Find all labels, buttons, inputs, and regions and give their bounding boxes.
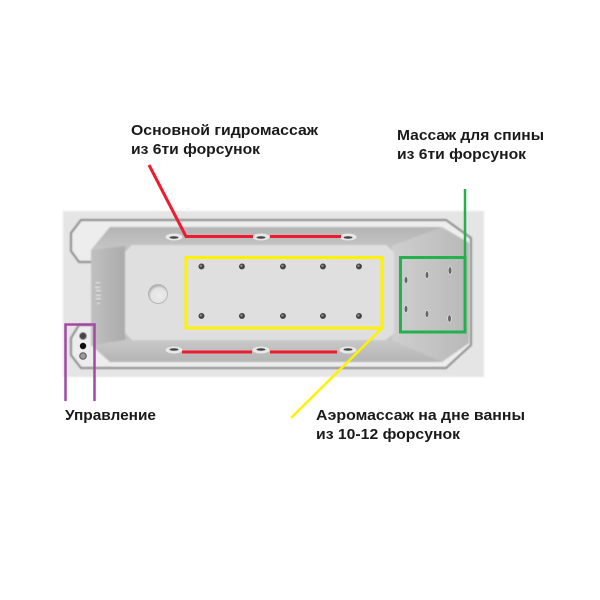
floor jets [198, 264, 362, 319]
label: back massage: из 6ти форсунок [397, 146, 527, 163]
label: aeromassage: из 10-12 форсунок [316, 426, 461, 443]
rim inner surface [71, 220, 471, 368]
red markers: main hydromassage [149, 165, 341, 352]
label: main hydromassage: Основной гидромассаж [131, 122, 318, 139]
drain [148, 284, 168, 304]
basin [91, 227, 469, 362]
rim [71, 220, 471, 368]
green marker: back massage [400, 189, 465, 332]
label: back massage: Массаж для спины [397, 127, 544, 144]
label: main hydromassage: из 6ти форсунок [131, 141, 261, 158]
tub deck [63, 211, 484, 377]
bathtub [63, 211, 484, 377]
back jets [404, 267, 452, 322]
label: controls: Управление [65, 407, 156, 424]
label: aeromassage: Аэромассаж на дне ванны [316, 407, 525, 424]
purple marker: controls [66, 324, 94, 401]
side jets [166, 234, 356, 354]
controls [80, 332, 86, 359]
yellow marker: aeromassage [186, 258, 382, 418]
overflow [95, 283, 101, 303]
basin floor [125, 245, 394, 340]
